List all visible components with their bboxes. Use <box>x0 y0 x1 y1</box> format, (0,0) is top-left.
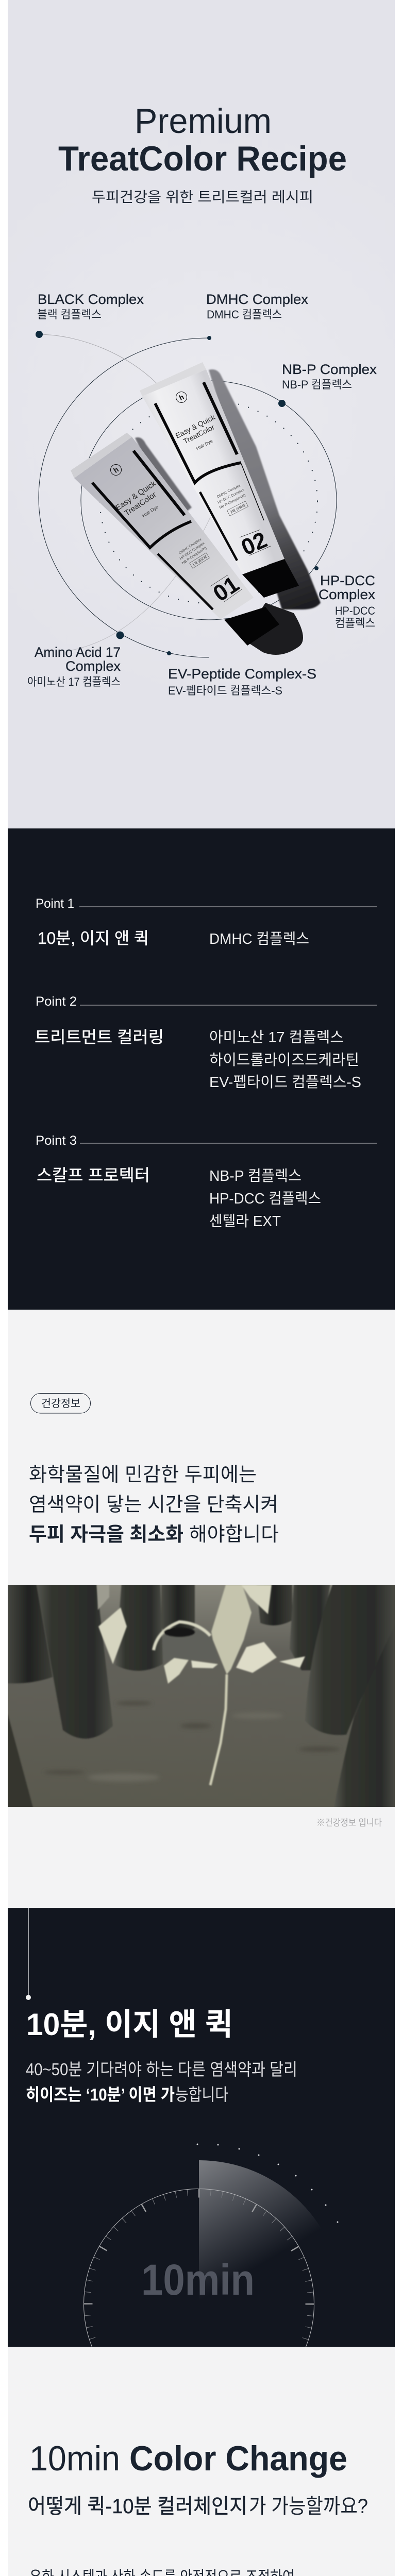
product: tube 02: DMHC Complex <box>216 484 242 499</box>
product: tube 02: h <box>178 393 185 402</box>
text block: 10 minute description: 능합니다 <box>175 2085 228 2104</box>
label: NB-P Complex: NB-P Complex <box>282 362 377 377</box>
image: scalp and hair follicles <box>5 1582 397 1809</box>
diagram: orbit lines <box>39 334 337 657</box>
product: tube 01: NB P-Complex(N) <box>181 546 207 565</box>
label: HP-DCC Complex: HP-DCC <box>335 604 375 617</box>
label: DMHC Complex: DMHC 컴플렉스 <box>207 308 282 321</box>
product: tube 01: 01 <box>209 571 244 606</box>
label: BLACK Complex: 블랙 컴플렉스 <box>37 308 102 321</box>
product: tube 01: Hair Dye <box>141 504 159 518</box>
point 1: Point 1 <box>36 896 74 911</box>
label: Amino Acid 17 Complex <box>27 645 121 688</box>
label: HP-DCC Complex: HP-DCC <box>320 573 375 588</box>
panel: health information <box>5 1310 397 1908</box>
label: EV-Peptide Complex-S: EV-Peptide Complex-S <box>168 666 316 682</box>
timer wedge <box>199 2160 316 2290</box>
subheading: how is it possible: 어떻게 퀵-10분 컬러체인지 <box>28 2495 247 2518</box>
heading: 10min Color Change: 10min <box>29 2439 120 2478</box>
point 1 <box>36 896 377 947</box>
subheading: how is it possible: 가 가능할까요? <box>249 2495 368 2518</box>
label: HP-DCC Complex: 컴플렉스 <box>335 617 375 630</box>
product: tube 02: HP-DCC Complex <box>217 488 245 505</box>
text block: scalp irritation: 염색약이 닿는 시간을 단축시켜 <box>29 1494 278 1516</box>
label: EV-Peptide Complex-S: EV-펩타이드 컴플렉스-S <box>168 684 282 697</box>
label: HP-DCC Complex <box>319 573 376 630</box>
heading: 10min Color Change <box>32 2445 346 2478</box>
label: DMHC Complex <box>206 292 309 321</box>
product: tube 02: 02 <box>238 527 271 561</box>
title: Premium: Premium <box>135 101 272 141</box>
point 3: 스칼프 프로텍터 <box>37 1166 150 1184</box>
point 3: Point 3 <box>36 1133 77 1148</box>
product: tube 02: 2제 산화제 <box>229 503 246 515</box>
timer ring and ticks <box>83 2189 314 2347</box>
subtitle: 두피건강을 위한 트리트컬러 레시피 <box>92 189 313 205</box>
text block: 10 minute description: 40~50분 기다려야 하는 다른 염색약과 달리 <box>26 2060 297 2079</box>
badge: 건강정보 <box>31 1393 91 1413</box>
label: Amino Acid 17 Complex: 아미노산 17 컴플렉스 <box>27 675 121 688</box>
point 2: 아미노산 17 컴플렉스 <box>209 1029 344 1046</box>
label: NB-P Complex <box>282 362 377 391</box>
label: NB-P Complex: NB-P 컴플렉스 <box>282 378 352 391</box>
title: TreatColor Recipe: TreatColor Recipe <box>58 139 347 178</box>
note: health information disclaimer: ※건강정보 입니다 <box>316 1816 382 1829</box>
product: tube 01 <box>71 433 279 646</box>
badge: 건강정보: 건강정보 <box>41 1398 80 1410</box>
point 3 <box>36 1133 377 1230</box>
panel: 10 minute easy and quick <box>8 1908 395 2347</box>
product: tube 02: Easy & Quick <box>174 413 217 440</box>
panel: 10min color change <box>8 2347 395 2576</box>
timer outer dots <box>197 2143 338 2223</box>
product: tube 01: Easy & Quick <box>114 479 158 512</box>
chart: 10 minute timer dial <box>83 2143 338 2347</box>
text block: 10 minute description: 히이즈는 ‘10분’ 이면 가 <box>26 2085 175 2104</box>
product: tube 01: 1제 염모제 <box>191 554 208 567</box>
label: DMHC Complex: DMHC Complex <box>206 292 309 307</box>
diagram: marker dots <box>36 331 319 655</box>
subheading: how is it possible <box>29 2496 367 2515</box>
product: tube 01: TreatColor <box>123 490 158 518</box>
point 1: 10분, 이지 앤 퀵 <box>38 929 149 947</box>
label: BLACK Complex <box>37 292 144 321</box>
product: tube 02: NB P-Complex(N) <box>219 494 246 510</box>
product: tube 02: Hair Dye <box>195 438 214 451</box>
point 2: 트리트먼트 컬러링 <box>35 1028 164 1046</box>
icon: vertical pointer line <box>26 1908 31 2000</box>
label: EV-Peptide Complex-S <box>168 666 316 697</box>
product: tube 02: TreatColor <box>182 422 216 446</box>
point 3: 센텔라 EXT <box>209 1213 281 1230</box>
point 2 <box>35 994 377 1091</box>
timer label: 10min <box>141 2256 255 2304</box>
text block: scalp irritation <box>29 1464 279 1546</box>
product: tube shadows <box>135 369 321 655</box>
label: BLACK Complex: BLACK Complex <box>38 292 144 307</box>
product: tube 01: h <box>112 465 120 474</box>
point 1: DMHC 컴플렉스 <box>209 931 309 947</box>
heading: 10분, 이지 앤 퀵: 10분, 이지 앤 퀵 <box>26 2007 233 2042</box>
point 3: HP-DCC 컴플렉스 <box>209 1191 321 1207</box>
label: Amino Acid 17 Complex: Complex <box>65 658 121 674</box>
product: tube 02 <box>140 362 299 598</box>
panel: three points <box>8 828 395 1310</box>
panel: product recipe hero <box>8 0 395 828</box>
text block: scalp irritation: 해야합니다 <box>189 1524 279 1546</box>
text block: scalp irritation: 화학물질에 민감한 두피에는 <box>29 1464 257 1486</box>
point 2: EV-펩타이드 컴플렉스-S <box>209 1074 361 1091</box>
heading: 10min Color Change: Color Change <box>129 2439 347 2478</box>
point 2: Point 2 <box>36 994 77 1009</box>
point 3: NB-P 컴플렉스 <box>209 1168 301 1184</box>
product: tube 01: HP-DCC Complex <box>179 541 206 561</box>
product: tube 01: DMHC Complex <box>178 537 202 555</box>
text block: 10 minute description <box>26 2060 297 2104</box>
label: Amino Acid 17 Complex: Amino Acid 17 <box>35 645 121 660</box>
text block: scalp irritation: 두피 자극을 최소화 <box>29 1524 183 1546</box>
label: HP-DCC Complex: Complex <box>319 587 376 602</box>
point 2: 하이드롤라이즈드케라틴 <box>209 1052 359 1069</box>
